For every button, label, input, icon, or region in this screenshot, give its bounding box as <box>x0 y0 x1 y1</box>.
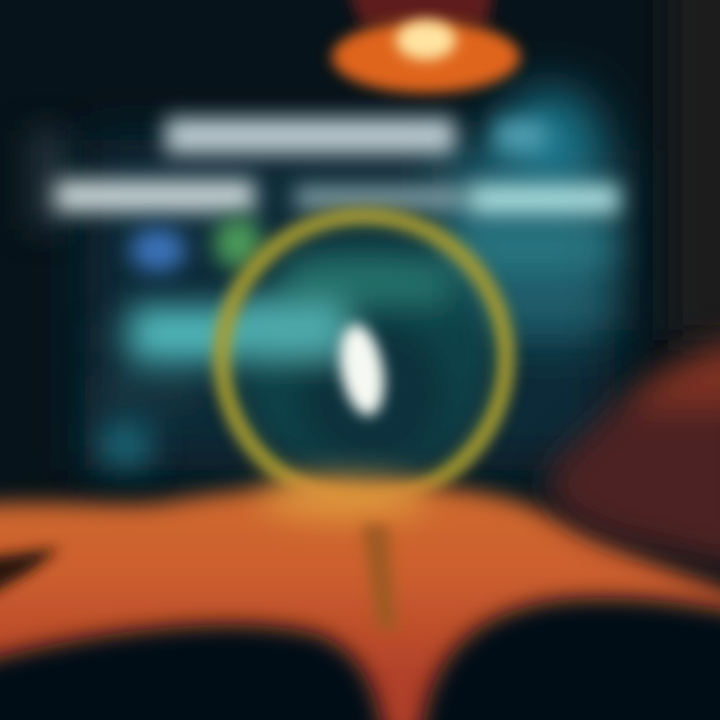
white cursor hand <box>333 321 391 419</box>
teal bands on screen <box>30 130 615 465</box>
book spine <box>362 525 396 630</box>
magnifier glow on book <box>260 478 430 518</box>
lamp orange glow <box>332 21 520 93</box>
headline blur <box>55 118 620 214</box>
magnifier yellow ring <box>222 216 506 500</box>
right dark wall <box>668 0 720 340</box>
magnifier lens interior <box>240 235 490 485</box>
lamp shade top <box>345 0 495 25</box>
lamp bright bulb <box>396 20 456 60</box>
blue and green icons <box>130 217 262 272</box>
hand at right <box>548 335 720 570</box>
hanging lamp <box>332 0 520 93</box>
book pages <box>0 487 720 720</box>
screen glow <box>85 92 615 470</box>
dark foreground silhouettes <box>0 598 720 720</box>
dark wedge on left <box>0 548 60 600</box>
